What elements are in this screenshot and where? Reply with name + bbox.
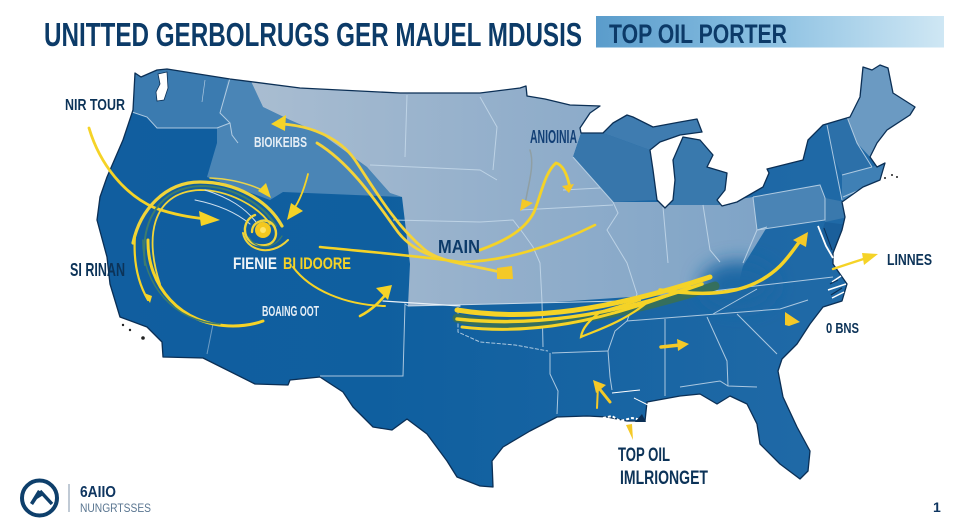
state borders <box>132 78 878 414</box>
label: northwest: NIR TOUR <box>65 97 125 114</box>
label: gulf importer: IMLRIONGET <box>620 468 708 489</box>
title: UNITTED GERBOLRUGS GER MAUEL MDUSIS <box>44 16 582 53</box>
header banner <box>596 16 944 49</box>
arrow: Minnesota downflow <box>520 150 533 211</box>
label: southeast: 0 BNS <box>826 320 859 337</box>
arrow: central northwest return <box>271 115 513 279</box>
arrow: southern pipeline bundle <box>457 232 808 337</box>
oil flow arrows <box>89 115 878 440</box>
logo <box>22 480 151 516</box>
logo: NUNGRTSSES <box>80 501 151 515</box>
map of the United States <box>90 60 920 490</box>
label: Minnesota: ANIOINIA <box>530 127 577 147</box>
label: Atlantic: LINNES <box>887 252 932 269</box>
icon: swirl <box>243 215 288 250</box>
logo: 6AIIO <box>80 484 116 501</box>
arrow: from Wyoming into swirl <box>287 174 308 220</box>
label: west coast: SI RINAN <box>70 260 125 280</box>
icon: hammer badge <box>22 480 57 516</box>
label: central hub <box>233 255 351 273</box>
coastline <box>97 65 915 487</box>
arrow: plains to Illinois <box>320 225 595 262</box>
label: plains: MAIN <box>438 237 480 257</box>
arrow: Alabama <box>661 339 689 351</box>
arrow: thin feed <box>210 178 271 198</box>
label: Idaho area: BIOIKEIBS <box>254 134 307 151</box>
arrow: Carolina <box>785 312 800 326</box>
arrow: rockies to plains <box>293 267 460 316</box>
arrow: western loop into swirl <box>133 182 282 326</box>
label: southwest: BOAING OOT <box>262 303 319 320</box>
label: central hub: FIENIE <box>233 255 277 273</box>
label: gulf importer: TOP OIL <box>618 445 670 466</box>
arrow: Louisiana <box>593 380 610 408</box>
header banner: TOP OIL PORTER <box>609 19 787 49</box>
arrow: northwest inflow <box>89 128 220 226</box>
arrow: gulf drop <box>626 424 633 440</box>
coastal inlets <box>122 72 898 422</box>
page number: 1 <box>933 499 941 515</box>
arrow: Atlantic export <box>833 253 878 269</box>
arrow: upper midwest hook <box>480 163 574 250</box>
label: gulf importer <box>618 445 708 489</box>
label: central hub: BI IDOORE <box>283 255 351 273</box>
